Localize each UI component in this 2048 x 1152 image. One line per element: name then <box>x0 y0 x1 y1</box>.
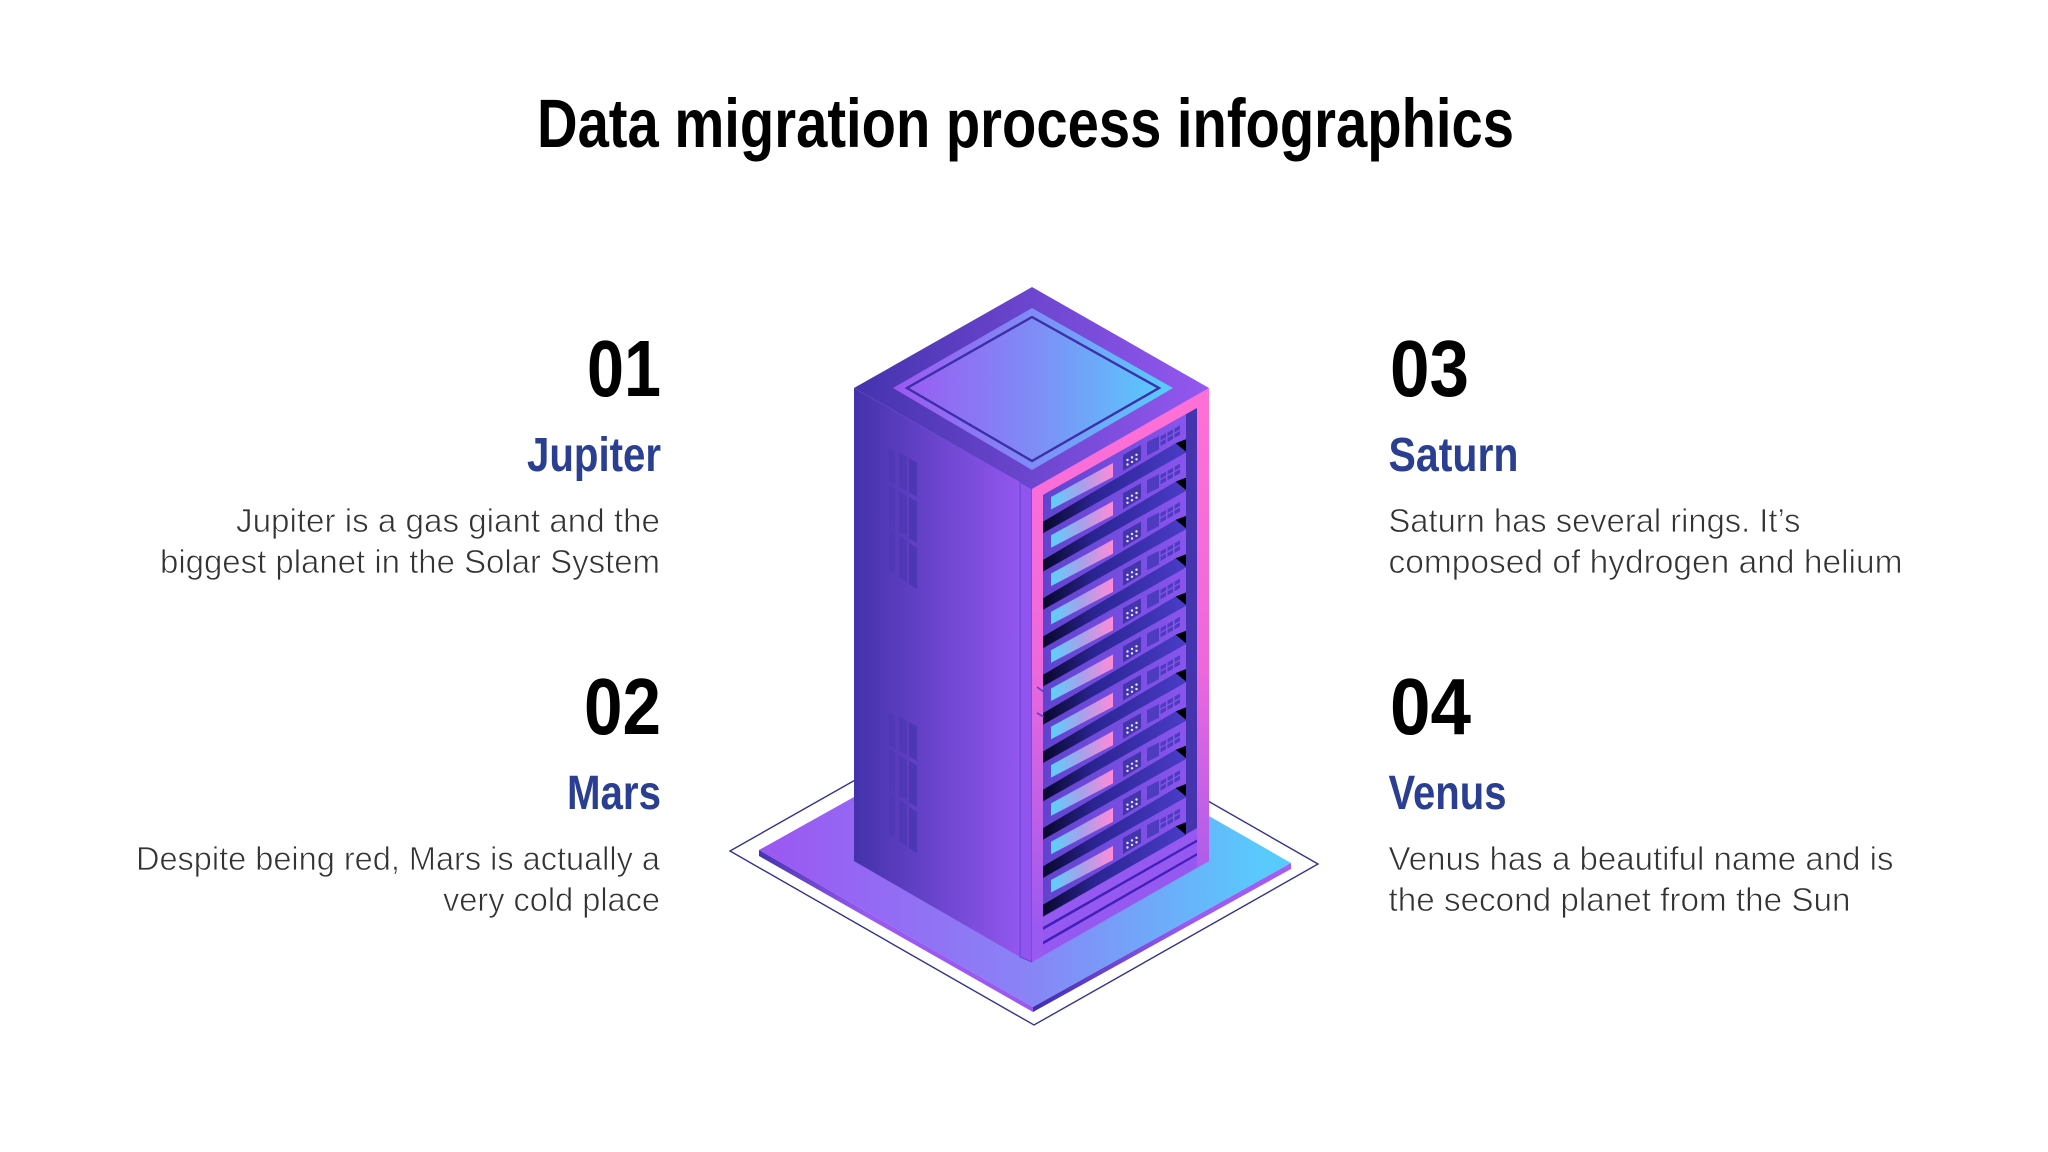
bottom vent lines <box>1043 840 1197 944</box>
side vent lower <box>889 712 917 853</box>
illustration: isometric server rack <box>730 287 1318 1025</box>
item 01: Jupiter: Jupiter is a gas giant and the <box>236 502 660 539</box>
item 02: Mars: 02 <box>584 662 661 751</box>
item 01: Jupiter: biggest planet in the Solar System <box>160 543 660 580</box>
item 01: Jupiter: Jupiter <box>527 429 661 482</box>
server units <box>1043 414 1186 916</box>
item 04: Venus <box>1388 662 1894 918</box>
item 02: Mars: Mars <box>567 767 661 820</box>
door hinges <box>1037 687 1044 717</box>
item 03: Saturn: Saturn <box>1388 429 1518 482</box>
item 03: Saturn: composed of hydrogen and helium <box>1388 543 1902 580</box>
item 02: Mars: very cold place <box>443 881 660 918</box>
item 04: Venus: 04 <box>1390 662 1471 751</box>
item 04: Venus: the second planet from the Sun <box>1388 881 1850 918</box>
side vent upper <box>889 448 917 589</box>
item 03: Saturn: 03 <box>1390 324 1469 413</box>
front frame <box>1032 388 1209 962</box>
item 03: Saturn <box>1388 324 1902 580</box>
rack top <box>854 287 1209 489</box>
platform outline <box>730 690 1318 1025</box>
item 04: Venus: Venus has a beautiful name and is <box>1388 840 1894 877</box>
item 02: Mars: Despite being red, Mars is actually a <box>136 840 661 877</box>
item 02: Mars <box>136 662 661 918</box>
front pillar <box>1020 482 1032 962</box>
item 04: Venus: Venus <box>1388 767 1506 820</box>
item 03: Saturn: Saturn has several rings. It’s <box>1388 502 1800 539</box>
platform <box>759 706 1291 1012</box>
title: Data migration process infographics <box>537 85 1514 162</box>
item 01: Jupiter <box>160 324 661 580</box>
item 01: Jupiter: 01 <box>587 324 661 413</box>
rack left side panel <box>854 388 1020 957</box>
